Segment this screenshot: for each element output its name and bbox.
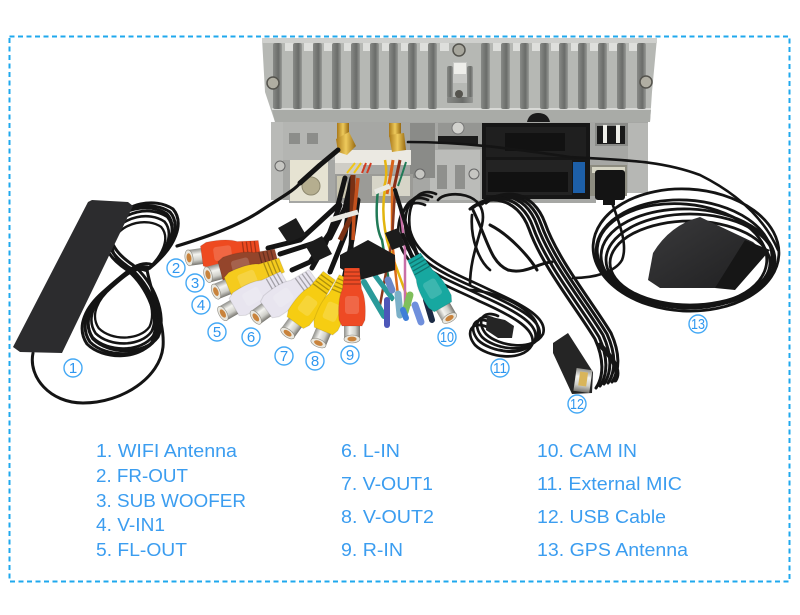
legend column 1: 2. FR-OUT	[96, 465, 188, 486]
badge 4	[192, 296, 210, 314]
number badges	[64, 259, 707, 413]
external mic cable	[398, 192, 544, 356]
legend column 3: 13. GPS Antenna	[537, 539, 689, 560]
connector 6 white	[245, 265, 321, 331]
wire bundle	[268, 175, 432, 325]
GPS puck	[648, 217, 762, 288]
badge 13: 13	[691, 316, 705, 333]
wire terminals	[364, 270, 432, 325]
connector 4 yellow	[207, 253, 287, 306]
USB port	[595, 123, 628, 146]
cable to head unit	[177, 183, 300, 246]
badge 9	[341, 346, 359, 364]
mic head	[486, 316, 514, 338]
GPS cable	[408, 142, 778, 278]
legend column 3: 12. USB Cable	[537, 506, 666, 527]
badge 7	[275, 347, 293, 365]
legend column 1: 5. FL-OUT	[96, 539, 187, 560]
badge 2: 2	[172, 260, 180, 277]
connector 3 brown	[201, 243, 280, 289]
blue fuse	[573, 162, 585, 193]
cable tags	[278, 218, 405, 280]
badge 1	[64, 359, 82, 377]
connector 2 red	[183, 235, 261, 272]
beige socket	[290, 160, 328, 201]
badge 8: 8	[311, 353, 319, 370]
legend column 1: 4. V-IN1	[96, 514, 165, 535]
black connector block	[482, 123, 590, 199]
legend column 1: 3. SUB WOOFER	[96, 490, 246, 511]
coil	[590, 184, 782, 316]
lower chassis	[271, 122, 648, 203]
legend column 1	[96, 440, 246, 560]
badge 6	[242, 328, 260, 346]
badge 4: 4	[197, 297, 205, 314]
legend column 2: 7. V-OUT1	[341, 473, 433, 494]
head unit rear	[262, 38, 657, 205]
white cable ties	[330, 186, 390, 220]
badge 1: 1	[69, 360, 77, 377]
badge 5: 5	[213, 324, 221, 341]
connector 9 red	[339, 268, 365, 343]
GPS antenna	[408, 142, 782, 316]
badge 5	[208, 323, 226, 341]
legend column 3: 11. External MIC	[537, 473, 682, 494]
badge 9: 9	[346, 347, 354, 364]
heat sink	[262, 38, 657, 122]
USB plug in socket	[590, 165, 627, 205]
badge 10: 10	[440, 329, 454, 346]
WIFI antenna	[13, 150, 338, 403]
legend column 3: 10. CAM IN	[537, 440, 637, 461]
connector 7 yellow	[274, 268, 340, 344]
gold antenna connectors	[336, 123, 406, 155]
badge 11: 11	[493, 360, 507, 377]
legend column 2	[341, 440, 434, 560]
legend column 2: 9. R-IN	[341, 539, 403, 560]
antenna blade	[13, 200, 133, 353]
antenna lead	[32, 270, 163, 403]
USB plug	[553, 333, 593, 394]
RCA connectors	[183, 235, 463, 352]
connector 8 yellow	[305, 273, 358, 352]
white wiring plugs	[335, 150, 413, 203]
legend column 3	[537, 440, 689, 560]
badge 12: 12	[570, 396, 584, 413]
badge 3	[186, 274, 204, 292]
badge 8	[306, 352, 324, 370]
badge 6: 6	[247, 329, 255, 346]
USB cable	[470, 194, 618, 394]
legend column 2: 8. V-OUT2	[341, 506, 434, 527]
connector 5 white	[213, 266, 291, 327]
badge 3: 3	[191, 275, 199, 292]
badge 2	[167, 259, 185, 277]
coil	[82, 203, 178, 356]
legend column 1: 1. WIFI Antenna	[96, 440, 238, 461]
connector 10 teal	[402, 250, 463, 328]
legend column 2: 6. L-IN	[341, 440, 400, 461]
badge 7: 7	[280, 348, 288, 365]
